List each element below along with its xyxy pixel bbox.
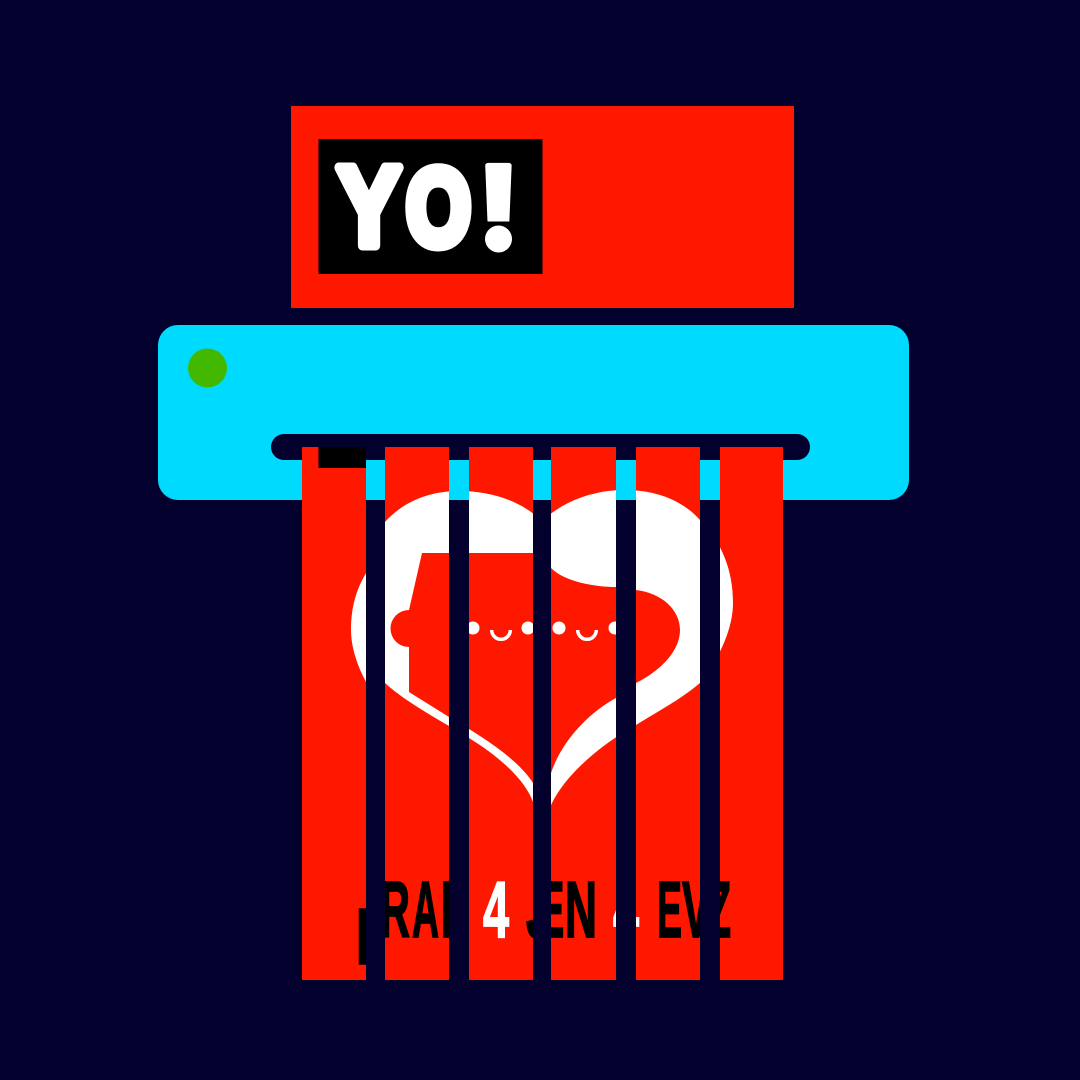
slogan: RA 4 JEN 4 EVZ: R bbox=[380, 865, 410, 954]
slogan fragment: D: D bbox=[440, 865, 480, 954]
face silhouette bbox=[409, 553, 680, 783]
slogan: RA 4 JEN 4 EVZ bbox=[385, 881, 730, 938]
YO! logo: O bbox=[406, 146, 470, 268]
slogan: RA 4 JEN 4 EVZ: E bbox=[657, 865, 682, 954]
heart with face on remaining strips bbox=[385, 490, 733, 805]
shredded logo fragment bbox=[318, 447, 366, 468]
ear bbox=[390, 610, 409, 647]
paper entering the shredder bbox=[291, 106, 794, 308]
YO! logo bbox=[318, 139, 542, 274]
slogan: RA 4 JEN 4 EVZ: A bbox=[412, 865, 439, 954]
slogan: RA 4 JEN 4 EVZ: V bbox=[682, 865, 710, 954]
shredded paper strips bbox=[302, 447, 783, 980]
shredder slot bbox=[271, 434, 810, 460]
slogan: RA 4 JEN 4 EVZ: 4 bbox=[613, 865, 639, 954]
icon: green power light bbox=[188, 348, 227, 388]
shredder body bbox=[158, 325, 909, 500]
YO! logo: Y bbox=[337, 144, 401, 270]
text: Z bbox=[707, 865, 731, 954]
heart bbox=[385, 490, 733, 805]
slogan: RA 4 JEN 4 EVZ: J bbox=[526, 865, 550, 954]
right eye dots and smile bbox=[552, 622, 622, 639]
slogan: RA 4 JEN 4 EVZ: N bbox=[565, 865, 597, 954]
YO! logo: ! bbox=[475, 142, 522, 270]
slogan: RA 4 JEN 4 EVZ: E bbox=[543, 865, 564, 954]
left eye dots and smile bbox=[466, 622, 534, 639]
heart on first strip bbox=[351, 573, 366, 682]
strip text fragment: B: B bbox=[356, 892, 390, 981]
slogan: RA 4 JEN 4 EVZ: 4 bbox=[483, 865, 509, 954]
